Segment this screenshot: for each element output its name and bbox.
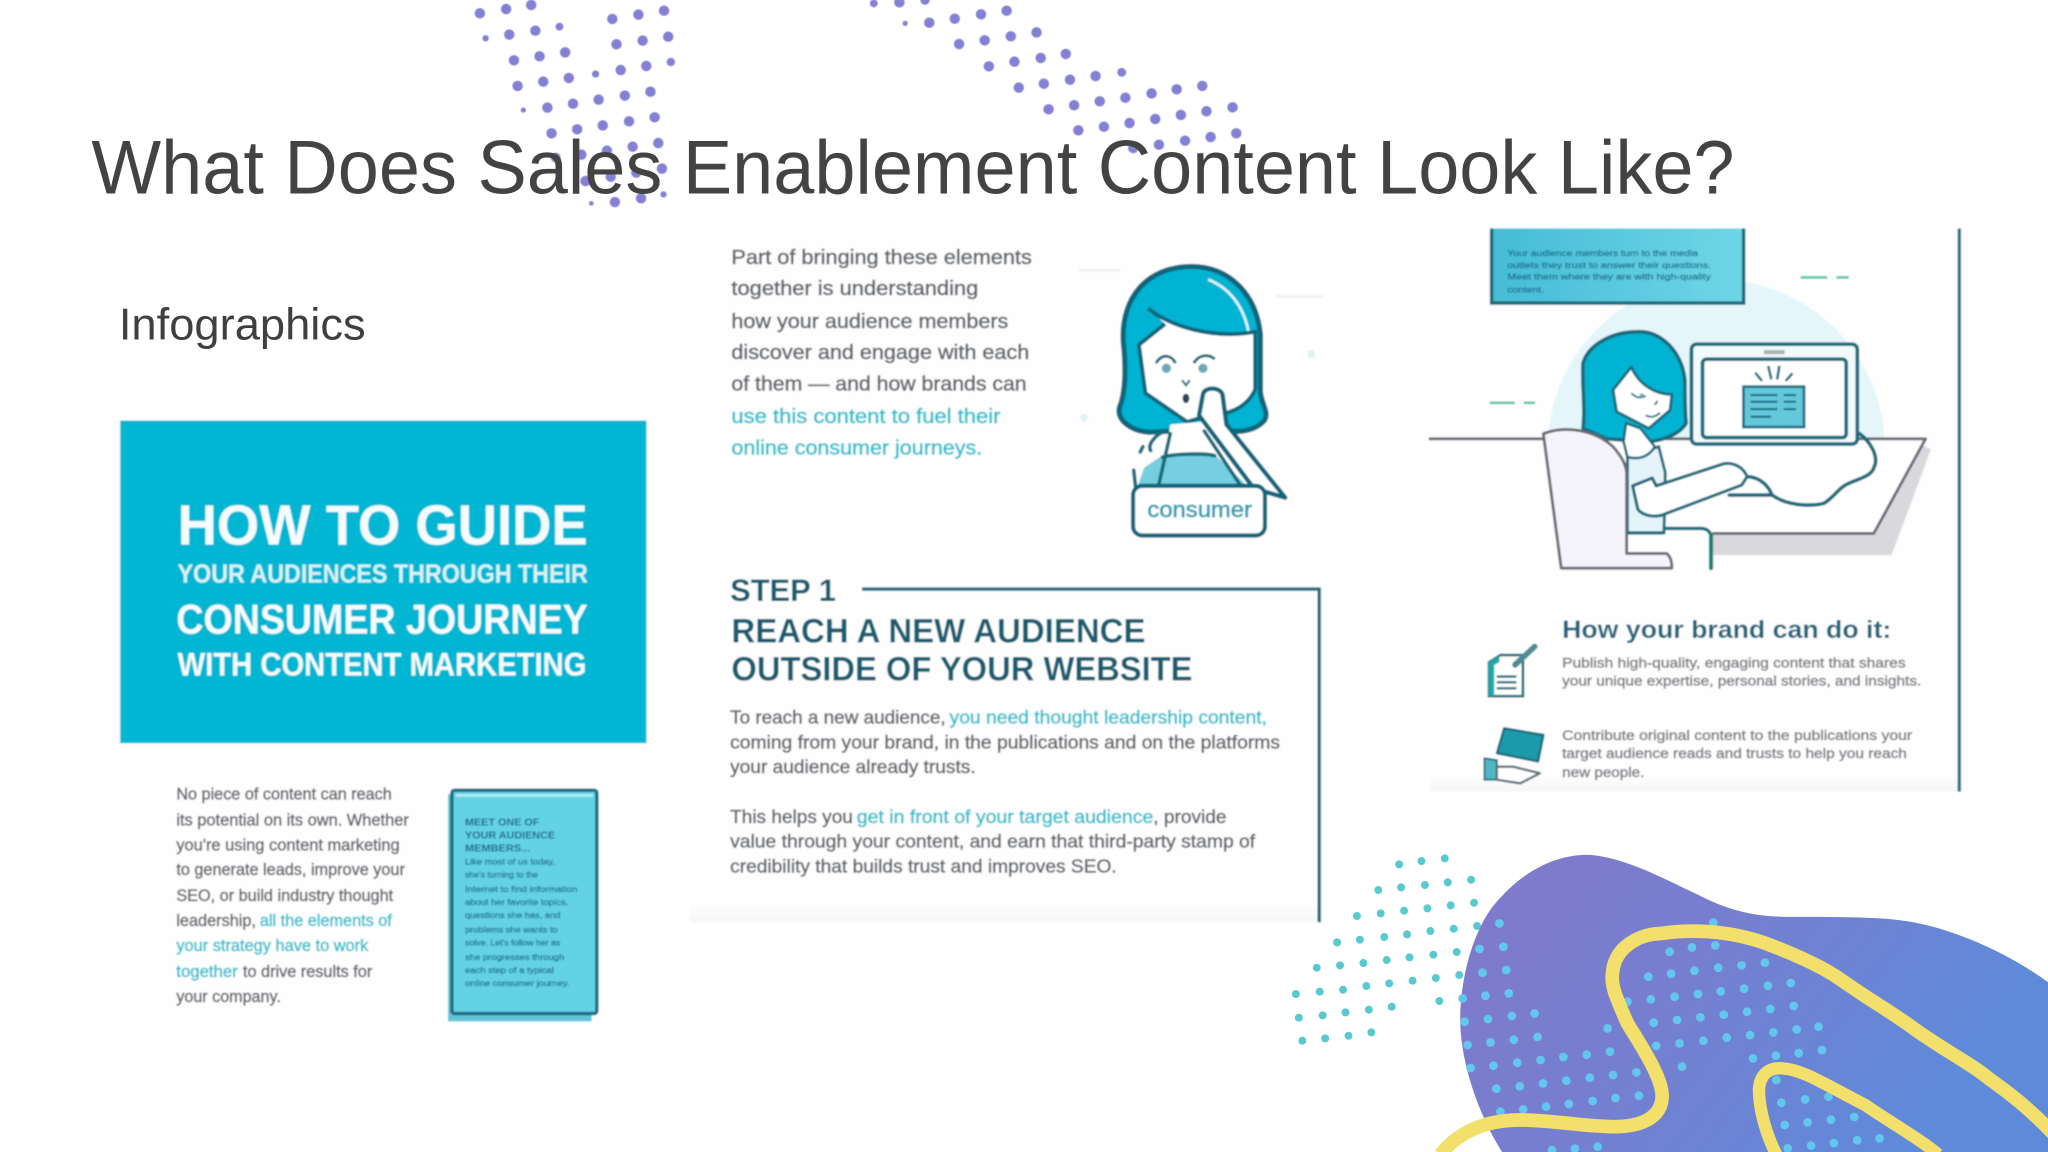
decorative dots: teal cluster — [1292, 854, 1481, 1045]
callout: meet one of your audience members: MEMBERS... — [465, 844, 531, 855]
purple blue blob — [1460, 855, 2048, 1152]
callout: meet one of your audience members: each step of a typical — [465, 966, 554, 975]
step body text: credibility that builds trust and improves SEO. — [730, 856, 1117, 876]
intro paragraph: No piece of content can reach — [176, 785, 392, 803]
callout: meet one of your audience members — [448, 790, 597, 1021]
callout: meet one of your audience members: about her favorite topics, — [465, 898, 568, 907]
step body text: This helps you — [730, 807, 853, 827]
step body text: value through your content, and earn that third-party stamp of — [730, 832, 1256, 852]
consumer journey paragraph: how your audience members — [731, 311, 1008, 333]
consumer sign — [1133, 486, 1265, 536]
intro paragraph: SEO, or build industry thought — [176, 887, 394, 905]
intro paragraph: all the elements of — [260, 912, 392, 930]
monitor — [1691, 344, 1857, 444]
callout: meet one of your audience members: she's turning to the — [465, 871, 539, 880]
step body text — [730, 708, 1280, 876]
decorative dots: top left cluster — [475, 0, 675, 207]
consumer sign: consumer — [1147, 497, 1253, 522]
text: contribute content — [1562, 727, 1913, 780]
hair — [1583, 332, 1686, 442]
illustration: woman at desk — [1430, 332, 1931, 568]
callout: meet one of your audience members: questions she has, and — [465, 911, 560, 920]
intro paragraph: you're using content marketing — [176, 836, 400, 854]
icon: hand holding tablet — [1484, 728, 1543, 783]
callout: meet one of your audience members: Like most of us today, — [465, 858, 555, 867]
torso — [1627, 447, 1665, 533]
step body text: To reach a new audience, — [730, 708, 946, 728]
yellow curve: long — [1441, 931, 2048, 1152]
right rule — [1958, 229, 1960, 792]
leg — [1627, 528, 1711, 538]
callout: meet one of your audience members: online consumer journey. — [465, 979, 569, 988]
heading: how your brand can do it: How your brand can do it: — [1562, 617, 1891, 644]
desk — [1713, 444, 1931, 555]
intro paragraph: leadership, — [176, 912, 256, 930]
intro paragraph: to generate leads, improve your — [176, 861, 405, 879]
step heading: REACH A NEW AUDIENCE — [731, 613, 1145, 651]
callout: meet one of your audience members: she progresses through — [465, 953, 564, 962]
text: contribute content: Contribute original content to the publications your — [1562, 727, 1913, 743]
step heading: STEP 1 — [730, 573, 836, 608]
panel: step 1 infographic — [690, 229, 1323, 922]
intro paragraph: its potential on its own. Whether — [176, 811, 409, 829]
consumer journey paragraph — [731, 247, 1032, 460]
callout: meet them where they are: outlets they trust to answer their questions. — [1507, 261, 1711, 270]
callout: meet them where they are — [1492, 229, 1744, 303]
mouse and cable — [1729, 434, 1876, 505]
consumer journey paragraph: of them — and how brands can — [731, 374, 1027, 396]
consumer journey paragraph: use this content to fuel their — [731, 406, 1001, 428]
intro paragraph: together — [176, 963, 238, 981]
intro paragraph: your strategy have to work — [176, 937, 369, 955]
callout: meet one of your audience members: Internet to find information — [465, 885, 577, 894]
banner: HOW TO GUIDE — [178, 494, 588, 557]
text: publish content — [1562, 654, 1921, 689]
eyes and mouth — [1156, 356, 1215, 363]
text: contribute content: target audience reads and trusts to help you reach — [1562, 745, 1907, 761]
step body text: you need thought leadership content, — [950, 708, 1267, 728]
icon: document and pen — [1488, 647, 1535, 696]
face — [1613, 367, 1672, 428]
hair — [1119, 266, 1266, 432]
banner — [120, 421, 647, 743]
raised arm — [1199, 389, 1285, 498]
step border line — [862, 589, 1319, 922]
intro paragraph: your company. — [176, 988, 281, 1006]
illustration: consumer woman with sign — [1079, 266, 1323, 536]
step body text: your audience already trusts. — [730, 757, 976, 777]
banner: YOUR AUDIENCES THROUGH THEIR — [178, 559, 588, 589]
chair — [1543, 429, 1672, 568]
neck and shirt — [1136, 455, 1251, 490]
text: publish content: your unique expertise, personal stories, and insights. — [1562, 673, 1921, 689]
callout: meet one of your audience members: MEET ONE OF — [465, 817, 539, 828]
banner: CONSUMER JOURNEY — [176, 595, 588, 642]
banner: WITH CONTENT MARKETING — [178, 645, 586, 682]
callout: meet them where they are: Your audience members turn to the media — [1507, 249, 1699, 258]
step heading — [730, 573, 1192, 688]
title: What Does Sales Enablement Content Look Like? — [91, 125, 1735, 210]
consumer journey paragraph: together is understanding — [731, 278, 978, 300]
decorative dots: top centre cluster — [870, 0, 1241, 153]
callout: meet them where they are: Meet them where they are with high-quality — [1507, 273, 1712, 282]
callout: meet them where they are: content. — [1507, 286, 1544, 295]
subtitle: Infographics: Infographics — [119, 301, 366, 350]
step body text: , provide — [1153, 807, 1226, 827]
callout: meet one of your audience members: YOUR AUDIENCE — [465, 831, 556, 842]
panel: how your brand can do it infographic — [1430, 229, 1960, 792]
intro paragraph — [176, 785, 409, 1006]
consumer journey paragraph: Part of bringing these elements — [731, 247, 1032, 269]
text: publish content: Publish high-quality, engaging content that shares — [1562, 654, 1906, 670]
face — [1139, 308, 1255, 422]
text: contribute content: new people. — [1562, 764, 1644, 780]
consumer journey paragraph: discover and engage with each — [731, 342, 1029, 364]
yellow curve: short — [1759, 1068, 1938, 1152]
step body text: get in front of your target audience — [857, 807, 1153, 827]
intro paragraph: to drive results for — [243, 963, 373, 981]
callout: meet one of your audience members: problems she wants to — [465, 926, 558, 935]
step heading: OUTSIDE OF YOUR WEBSITE — [731, 650, 1192, 688]
step body text: coming from your brand, in the publications and on the platforms — [730, 732, 1280, 752]
arm — [1633, 463, 1747, 516]
callout: meet one of your audience members: solve. Let's follow her as — [465, 939, 560, 948]
consumer journey paragraph: online consumer journeys. — [731, 438, 982, 460]
pale circle behind illustration — [1548, 282, 1884, 438]
panel: how to guide infographic — [91, 405, 669, 1028]
blue dots on blob — [1458, 918, 1884, 1152]
decorative blob with dots and yellow curves — [1441, 855, 2048, 1152]
